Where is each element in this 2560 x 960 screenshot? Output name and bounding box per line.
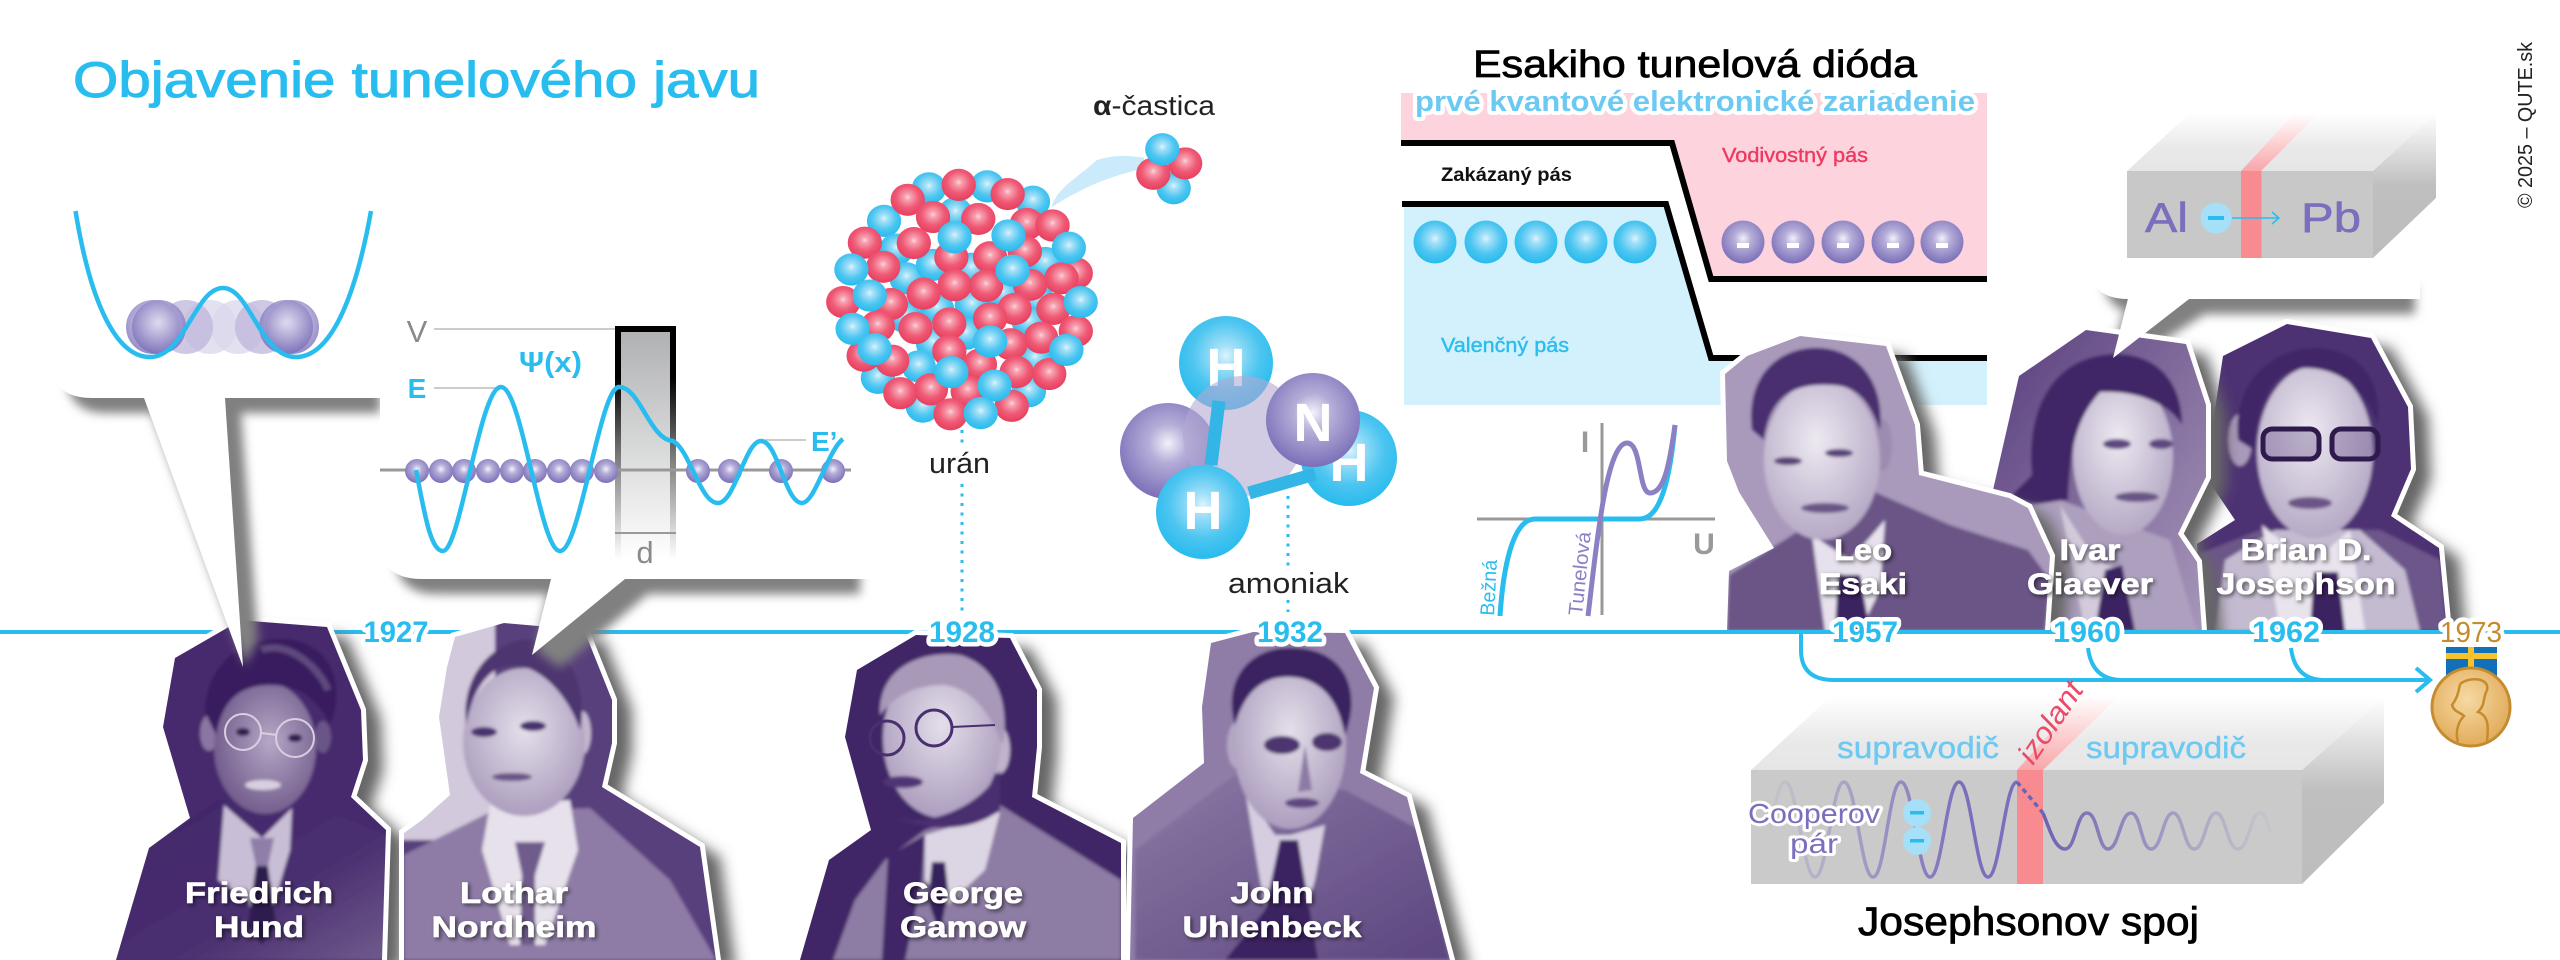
label Cooper pair [1748, 798, 1880, 859]
label conduction band: Vodivostný pás [1722, 145, 1868, 167]
label E: E [408, 373, 426, 404]
speech bubble: double well [51, 200, 385, 667]
label psi: Ψ(x) [519, 347, 582, 379]
portrait: Leo Esaki [1720, 330, 2070, 641]
Nobel medal [2432, 647, 2510, 746]
name: Leo Esaki: Leo [1834, 534, 1892, 567]
portrait: Lothar Nordheim [400, 615, 736, 960]
portrait: George Gamow: Gamow [900, 911, 1027, 944]
ammonia molecule: H [1206, 338, 1246, 398]
label: alpha particle: α-častica [1093, 90, 1215, 121]
year 1957: 1957 [1832, 616, 1898, 649]
copyright: © 2025 – QUTE.sk [2515, 41, 2537, 208]
name: Ivar Giaever: Ivar [2060, 534, 2121, 567]
Cooper pair [1903, 799, 1931, 855]
speech bubble: tunnelling barrier [380, 300, 890, 668]
label Cooper pair: Cooperov [1748, 798, 1880, 829]
name: Brian D. Josephson: Brian D. [2240, 534, 2372, 567]
label: amoniak: amoniak [1228, 568, 1350, 600]
particles on axis [405, 459, 845, 483]
Esaki band diagram [1401, 93, 1987, 405]
axis label U: U [1693, 528, 1715, 561]
conduction electrons [1722, 220, 1964, 264]
name: Brian D. Josephson [2216, 534, 2396, 601]
ammonia molecule: H [1330, 433, 1368, 493]
valence electrons [1414, 220, 1656, 264]
label Cooper pair: pár [1790, 828, 1838, 859]
electron with arrow [2200, 202, 2279, 234]
timeline right part [1700, 630, 2560, 634]
year 1928: 1928 [929, 616, 995, 649]
year 1960: 1960 [2053, 616, 2121, 649]
label V: V [407, 314, 428, 349]
label valence band: Valenčný pás [1441, 335, 1569, 357]
portrait: George Gamow: George [903, 877, 1023, 910]
name: Ivar Giaever: Giaever [2027, 568, 2153, 601]
bubble tail over Ivar [2113, 299, 2189, 358]
name: Leo Esaki: Esaki [1819, 568, 1907, 601]
speech bubble: Al-Pb junction [2089, 70, 2436, 365]
year 1932: 1932 [1257, 616, 1323, 649]
curve label tunnel diode: Tunelová [1565, 530, 1596, 617]
dotted line: uran [960, 430, 964, 612]
name: Leo Esaki [1819, 534, 1907, 601]
heading: Esaki diode: Esakiho tunelová dióda [1473, 44, 1918, 86]
name: Brian D. Josephson: Josephson [2216, 568, 2396, 601]
wave function [416, 387, 843, 551]
label d: d [636, 535, 654, 570]
timeline left part [0, 630, 1700, 634]
label superconductor right: supravodič [2086, 730, 2246, 765]
year 1973: 1973 [2440, 617, 2502, 649]
alpha particle with trail [1051, 133, 1202, 207]
title: Objavenie tunelového javu [73, 52, 760, 108]
label: uran: urán [929, 448, 990, 480]
portrait: George Gamow [795, 630, 1141, 960]
year 1962: 1962 [2252, 616, 2320, 649]
year 1927: 1927 [364, 616, 428, 649]
label E prime: E’ [811, 426, 837, 457]
arrows to Nobel prize [1801, 634, 2430, 692]
I-V chart [1477, 423, 1715, 617]
portrait: Ivar Giaever [1985, 325, 2226, 641]
label insulator: izolant [2011, 674, 2091, 770]
label Pb: Pb [2301, 194, 2361, 241]
ammonia molecule [1120, 316, 1397, 559]
portrait: Brian D. Josephson [2190, 320, 2467, 641]
double well curve [76, 211, 371, 357]
uranium nucleus [826, 169, 1098, 430]
name: Ivar Giaever [2027, 534, 2153, 601]
label superconductor left: supravodič [1837, 730, 1999, 765]
portrait: John Uhlenbeck: John [1230, 877, 1314, 910]
label Al: Al [2145, 194, 2188, 241]
curve label normal diode: Bežná [1477, 558, 1502, 616]
portrait: John Uhlenbeck [1125, 628, 1470, 960]
subheading: first quantum device: prvé kvantové elektronické zariadenie [1415, 86, 1975, 118]
portrait: Lothar Nordheim: Lothar [460, 877, 568, 910]
label forbidden band: Zakázaný pás [1441, 165, 1572, 186]
ammonia molecule: H [1184, 481, 1222, 541]
portrait: Friedrich Hund: Hund [214, 911, 304, 944]
tunnelling dotted segment [2017, 782, 2043, 813]
wave right [2043, 813, 2270, 849]
barrier [618, 329, 673, 559]
ammonia molecule: N [1294, 393, 1332, 453]
portrait: Friedrich Hund: Friedrich [185, 877, 333, 910]
axis label I: I [1581, 426, 1589, 459]
heading: Josephson junction: Josephsonov spoj [1858, 900, 2199, 944]
portrait: Lothar Nordheim: Nordheim [432, 911, 596, 944]
portrait: John Uhlenbeck: Uhlenbeck [1182, 911, 1362, 944]
spheres in wells [126, 300, 319, 354]
wave left [1770, 782, 2017, 877]
dotted line: amoniak [1286, 496, 1290, 612]
portrait: Friedrich Hund [110, 615, 406, 960]
Josephson junction block [1748, 674, 2384, 884]
